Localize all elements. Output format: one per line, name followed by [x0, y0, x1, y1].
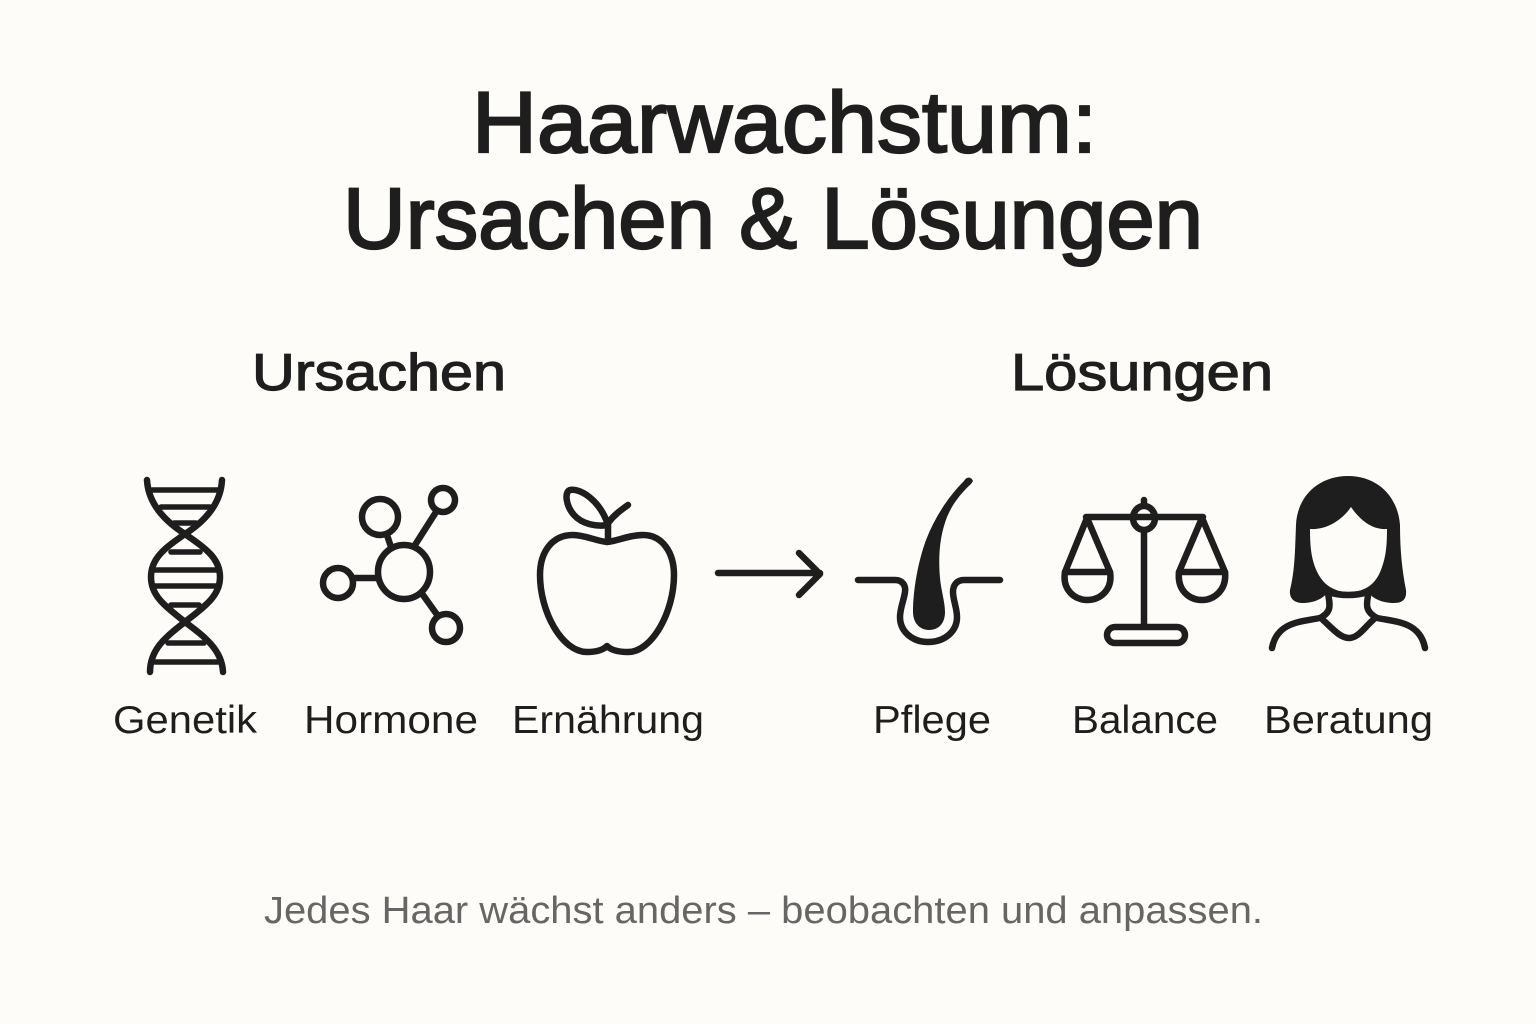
- icon: apple: [540, 490, 674, 652]
- label: Genetik: Genetik: [113, 699, 258, 742]
- label: Hormone: Hormone: [304, 699, 478, 742]
- icon: balance scale: [1065, 500, 1225, 643]
- icon: hair follicle: [858, 478, 1000, 642]
- footer note: Jedes Haar wächst anders – beobachten und anpassen.: [264, 890, 1263, 932]
- label: Beratung: Beratung: [1264, 699, 1433, 742]
- title: Haarwachstum:: [472, 75, 1097, 171]
- heading: Lösungen: Lösungen: [1011, 344, 1273, 402]
- title: [343, 75, 1203, 267]
- label: Pflege: Pflege: [873, 699, 991, 742]
- icon: hormone molecule: [323, 488, 460, 642]
- arrow: [718, 553, 820, 595]
- heading: Ursachen: Ursachen: [252, 344, 506, 402]
- label: Balance: Balance: [1072, 699, 1218, 742]
- icon: consultant woman: [1272, 476, 1425, 648]
- icon: DNA helix: [147, 480, 223, 672]
- label: Ernährung: Ernährung: [512, 699, 704, 742]
- title: Ursachen & Lösungen: [343, 171, 1203, 267]
